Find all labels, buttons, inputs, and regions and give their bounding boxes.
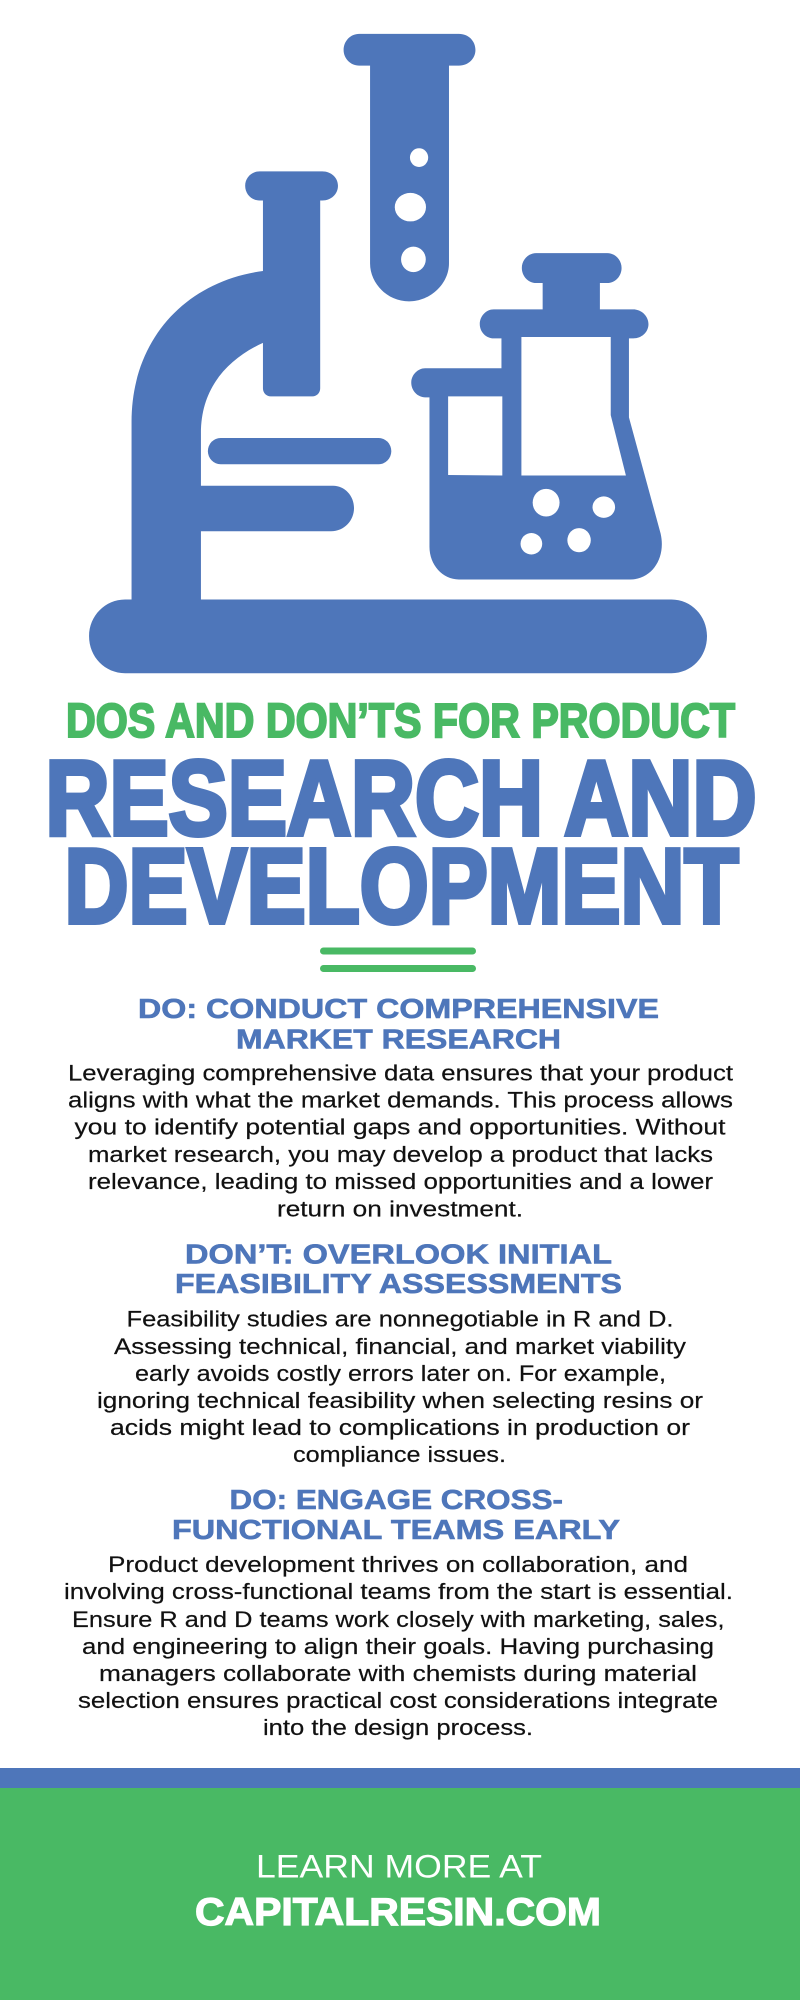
heading: FUNCTIONAL TEAMS EARLY bbox=[172, 1514, 620, 1545]
footer panel: call to action bbox=[0, 1788, 800, 2000]
body text: and engineering to align their goals. Having purchasing bbox=[82, 1634, 714, 1659]
icon: microscope, test tube and flask bbox=[89, 34, 707, 673]
body text bbox=[68, 1060, 734, 1222]
body text: Product development thrives on collaboration, and bbox=[108, 1552, 688, 1577]
body text: ignoring technical feasibility when selecting resins or bbox=[97, 1388, 704, 1413]
body text: Leveraging comprehensive data ensures that your product bbox=[68, 1060, 734, 1086]
cta label: LEARN MORE AT bbox=[256, 1848, 542, 1884]
body text: compliance issues. bbox=[293, 1442, 506, 1467]
section: do conduct comprehensive market research bbox=[68, 993, 734, 1222]
body text bbox=[64, 1552, 733, 1740]
section: don't overlook initial feasibility assessments bbox=[97, 1238, 704, 1467]
body text: market research, you may develop a product that lacks bbox=[88, 1142, 713, 1167]
body text: Assessing technical, financial, and market viability bbox=[114, 1334, 687, 1359]
title bbox=[46, 695, 756, 946]
heading bbox=[175, 1238, 622, 1299]
body text: into the design process. bbox=[263, 1715, 533, 1740]
body text: return on investment. bbox=[277, 1196, 523, 1222]
footer band: blue strip bbox=[0, 1768, 800, 1788]
heading: MARKET RESEARCH bbox=[236, 1024, 561, 1054]
body text: Feasibility studies are nonnegotiable in R and D. bbox=[126, 1306, 674, 1332]
icon: flask bbox=[411, 253, 662, 579]
body text: selection ensures practical cost considerations integrate bbox=[78, 1688, 718, 1713]
heading: DO: CONDUCT COMPREHENSIVE bbox=[138, 993, 659, 1024]
heading: DON’T: OVERLOOK INITIAL bbox=[185, 1238, 612, 1270]
heading bbox=[138, 993, 659, 1054]
body text: acids might lead to complications in production or bbox=[110, 1415, 691, 1440]
icon: test tube bbox=[344, 34, 475, 301]
body text: involving cross-functional teams from the start is essential. bbox=[64, 1579, 733, 1604]
body text: relevance, leading to missed opportunities and a lower bbox=[88, 1169, 714, 1194]
cta url: CAPITALRESIN.COM bbox=[195, 1891, 601, 1934]
section: do engage cross-functional teams early bbox=[64, 1484, 733, 1740]
body text bbox=[97, 1306, 704, 1467]
body text: aligns with what the market demands. This process allows bbox=[68, 1088, 733, 1112]
body text: you to identify potential gaps and opportunities. Without bbox=[74, 1114, 726, 1140]
icon: microscope bbox=[89, 171, 707, 673]
heading: DO: ENGAGE CROSS- bbox=[230, 1484, 563, 1515]
body text: Ensure R and D teams work closely with marketing, sales, bbox=[72, 1607, 724, 1632]
heading: FEASIBILITY ASSESSMENTS bbox=[175, 1268, 622, 1299]
body text: early avoids costly errors later on. For example, bbox=[135, 1361, 666, 1386]
body text: managers collaborate with chemists during material bbox=[99, 1661, 697, 1686]
heading bbox=[172, 1484, 620, 1545]
divider: double green bars bbox=[320, 948, 476, 972]
